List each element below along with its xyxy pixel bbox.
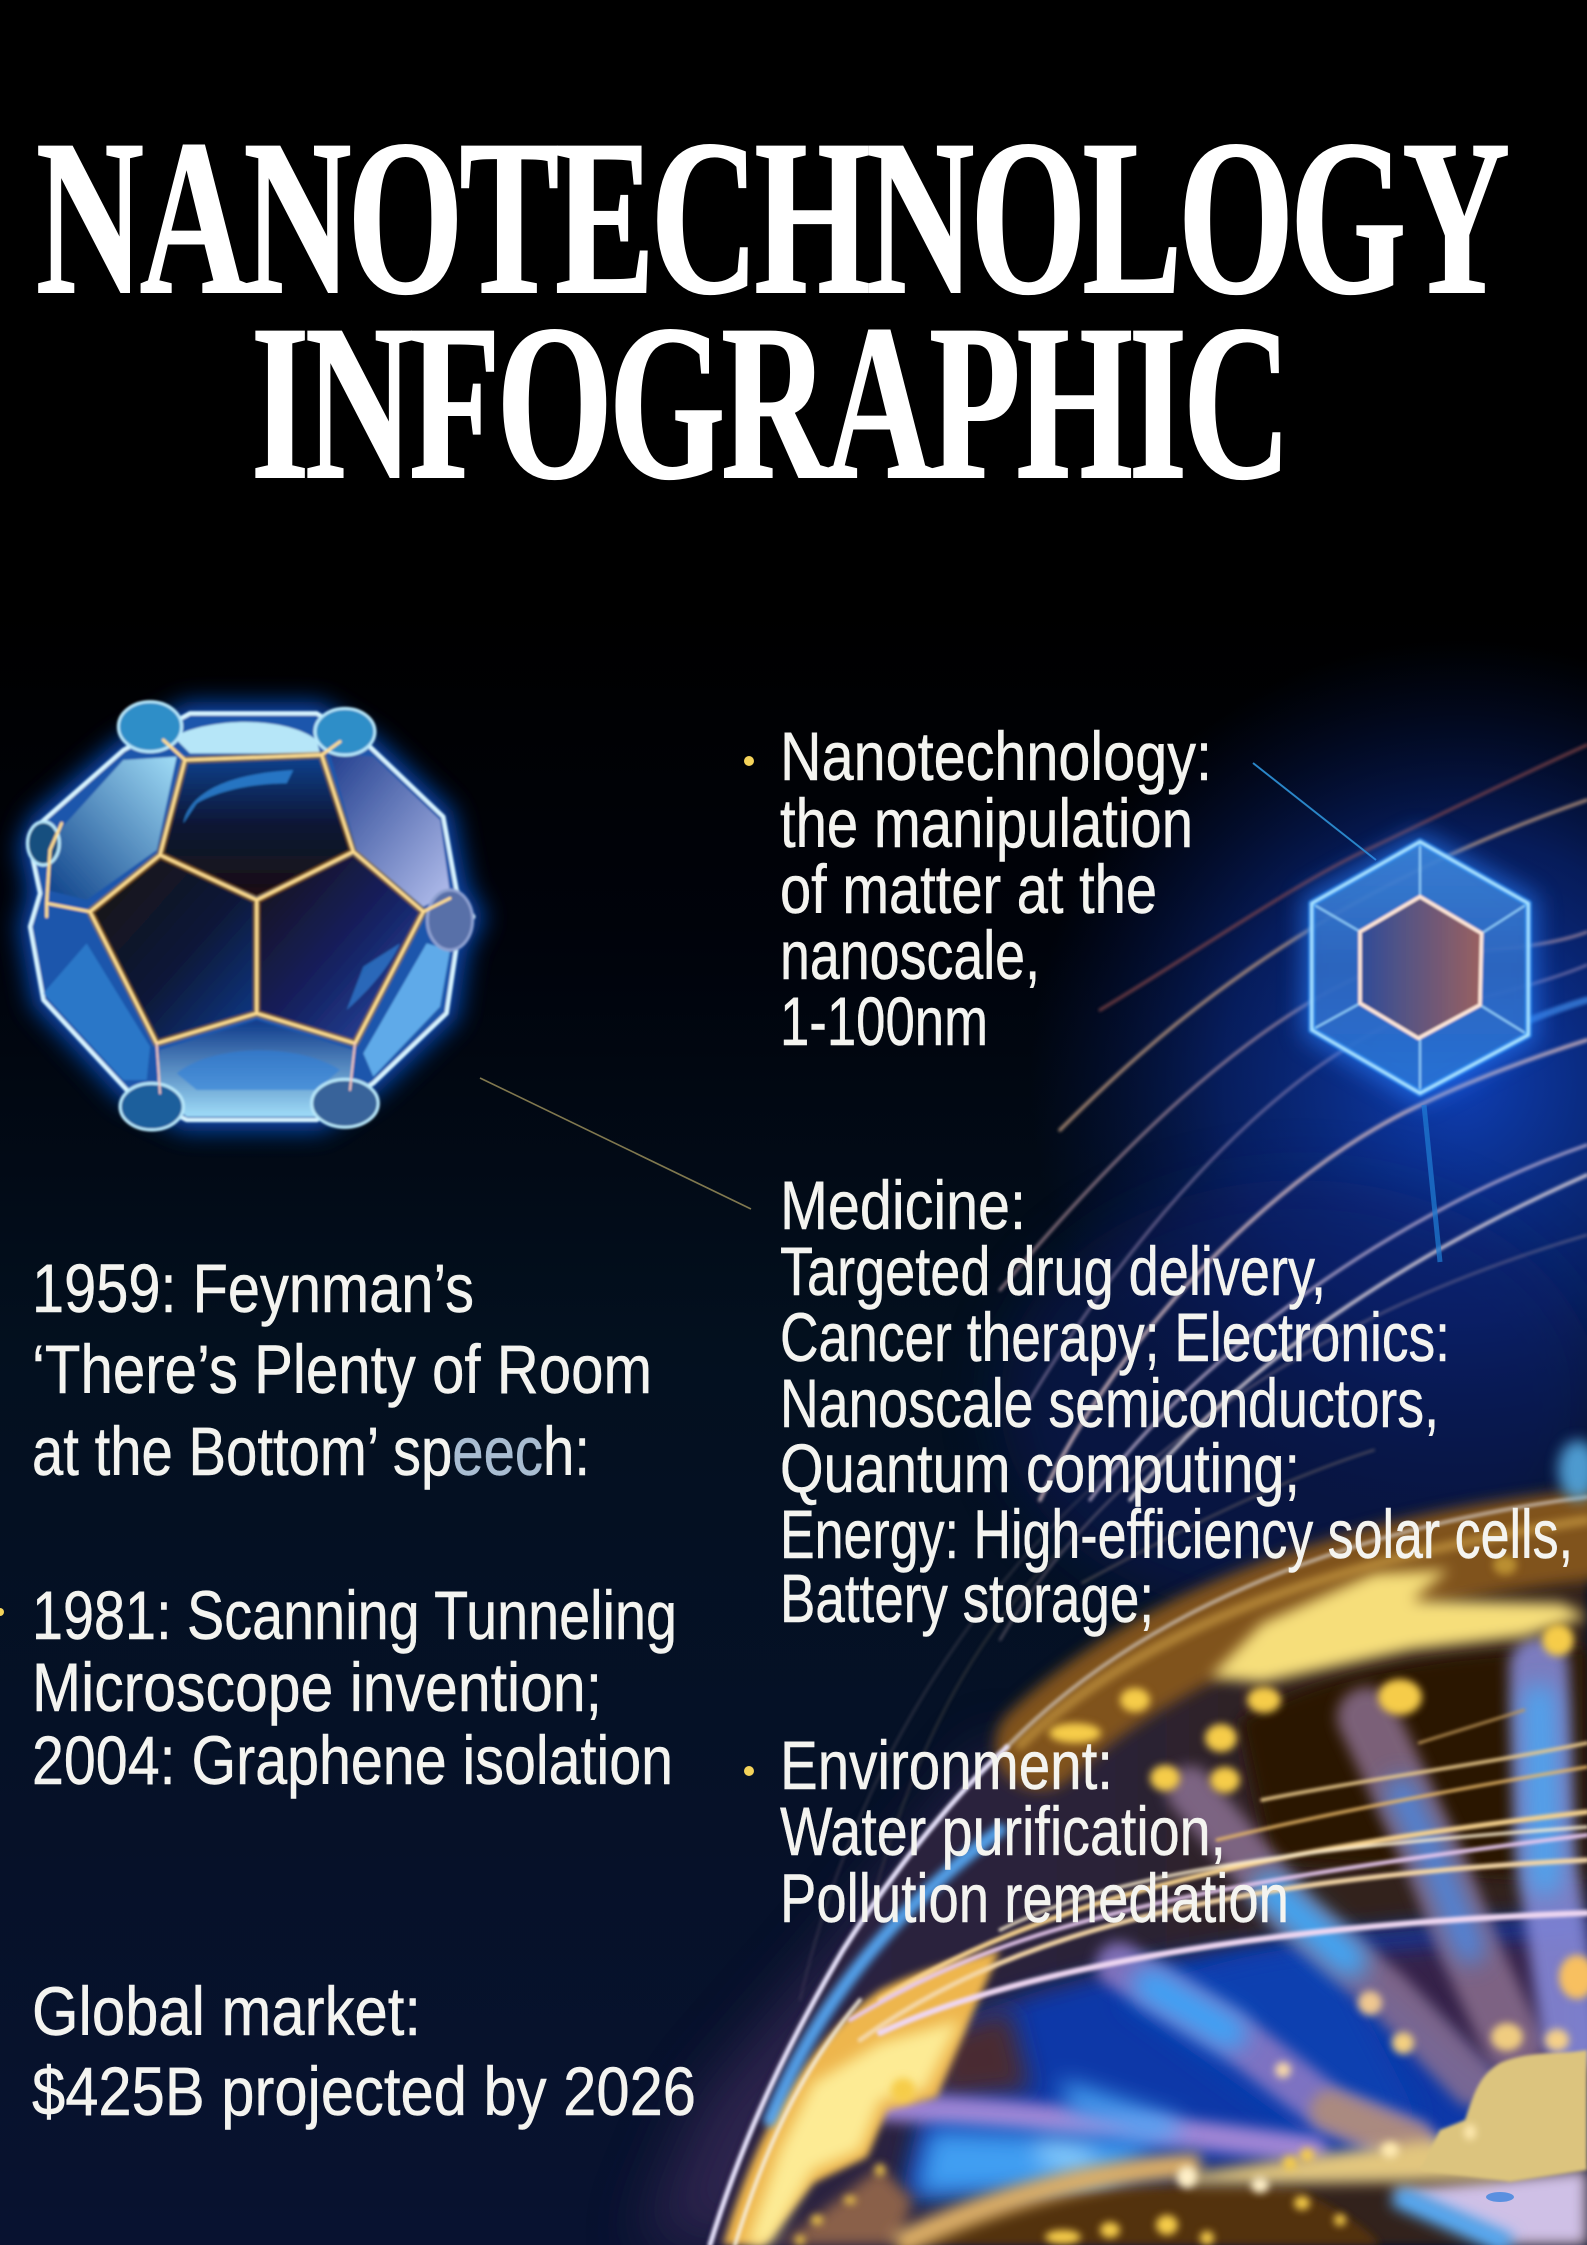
text: market: Global market: xyxy=(32,1973,421,2050)
text: applications: Quantum computing; xyxy=(780,1430,1300,1507)
sphere body xyxy=(27,702,473,1130)
text: history: 2004: Graphene isolation xyxy=(32,1722,673,1799)
icon: hexagonal crystal xyxy=(1312,842,1528,1093)
text: history: at the Bottom’ speech: xyxy=(32,1413,590,1490)
text: definition xyxy=(780,718,1212,1060)
text: applications: Battery storage; xyxy=(780,1560,1154,1637)
sphere outer glow xyxy=(30,713,473,1120)
text: environment: Water purification, xyxy=(780,1793,1226,1870)
text: environment: Pollution remediation xyxy=(780,1860,1289,1937)
DNA helix artwork xyxy=(640,1440,1587,2245)
hexagon spokes xyxy=(1312,842,1528,1093)
text: definition: nanoscale, xyxy=(780,917,1040,994)
bullets xyxy=(0,756,754,1776)
flat gold patch xyxy=(1420,2050,1587,2182)
text: definition: the manipulation xyxy=(780,785,1193,862)
helix haze xyxy=(640,1740,1050,2245)
text: definition: Nanotechnology: xyxy=(780,718,1212,795)
text: history: 1981: Scanning Tunneling xyxy=(32,1577,677,1654)
title xyxy=(36,95,1508,526)
text: market: $425B projected by 2026 xyxy=(32,2053,696,2130)
left gold wedge and outer arcs xyxy=(710,1747,1007,2245)
text: history: 1959: Feynman’s xyxy=(32,1250,474,1327)
text: definition: of matter at the xyxy=(780,851,1157,928)
text: history: Microscope invention; xyxy=(32,1649,602,1726)
text: history xyxy=(32,1250,677,1799)
sphere gold edges xyxy=(47,740,450,1093)
upper gold band xyxy=(1007,1497,1587,1747)
corner light xyxy=(1558,1440,1587,1500)
sphere facets xyxy=(43,722,450,1117)
hexagon body xyxy=(1312,842,1528,1093)
sphere glass shell xyxy=(30,713,473,1120)
text: definition: 1-100nm xyxy=(780,983,988,1060)
text: applications xyxy=(780,1167,1573,1637)
icon: fullerene sphere xyxy=(27,702,473,1130)
text: market xyxy=(32,1973,696,2130)
text: environment xyxy=(780,1727,1289,1937)
sphere corner nodes xyxy=(27,702,473,1130)
glowing fibre strands xyxy=(850,1710,1587,2040)
lower gold band xyxy=(897,2050,1587,2245)
text: history: ‘There’s Plenty of Room xyxy=(32,1331,652,1408)
light streaks behind content xyxy=(800,745,1587,2000)
text: environment: Environment: xyxy=(780,1727,1113,1804)
helix rungs xyxy=(887,1667,1572,2150)
gold sparkles xyxy=(795,1555,1587,2245)
lower cyan streaks xyxy=(915,2080,1180,2195)
text: applications: Medicine: xyxy=(780,1167,1026,1244)
text: applications: Targeted drug delivery, xyxy=(780,1233,1326,1310)
hexagon glow xyxy=(1312,842,1528,1093)
leader lines xyxy=(480,763,1440,1262)
helix interior xyxy=(710,1497,1587,2245)
